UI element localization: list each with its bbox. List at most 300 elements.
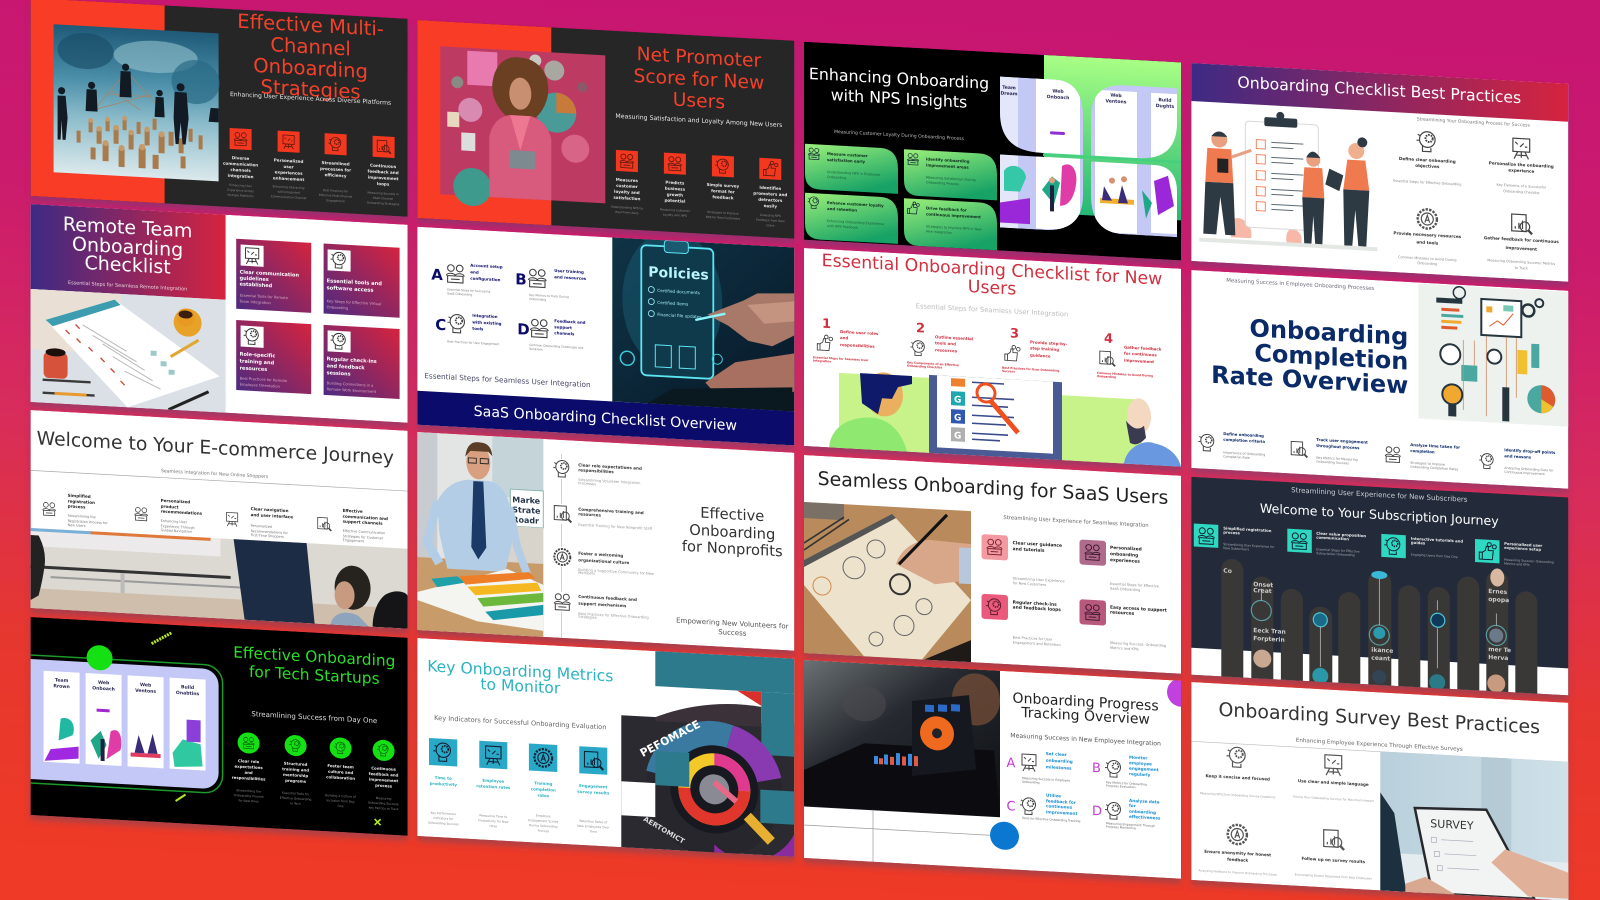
card: tools and software: Essential tools and (327, 278, 382, 287)
card: user guidance: and tutorials (1013, 546, 1045, 554)
photo: notebook with logo sketches (804, 502, 971, 662)
title: Checklist (84, 252, 171, 279)
card: user guidance: for New Customers (1013, 581, 1046, 587)
card: enhance loyalty: Enhancing Onboarding Experience (827, 219, 884, 226)
item: predicts growth: growth (667, 192, 683, 198)
item C: tools (472, 326, 484, 331)
subtitle: Measuring Success in Employee Onboarding Processes (1226, 278, 1374, 292)
card: user guidance: Streamlining User Experience (1013, 576, 1065, 583)
card: role-specific training: Employee Orientation (240, 382, 280, 389)
card: support resources (1080, 599, 1167, 653)
item: personalized experiences: enhancement (273, 175, 304, 182)
item: communication: communication and (343, 514, 388, 521)
illustration: phone screens panel: Team (55, 677, 69, 684)
item: personalize: experience (1508, 167, 1534, 174)
item: clear language: Use clear and simple language (1298, 778, 1369, 787)
item: continuous feedback: Onboarding Strategies (367, 200, 400, 206)
item: predicts growth (660, 152, 691, 218)
step 4: for continuous (1124, 351, 1157, 357)
item: registration (1194, 524, 1275, 553)
title: Seamless Onboarding for SaaS Users (818, 468, 1168, 509)
photo: man presenting marketing roadmap: Strate (512, 505, 541, 516)
card: identify improvement areas (904, 149, 997, 200)
card: regular check-ins: Regular check-ins (327, 356, 377, 365)
item B: Onboarding (529, 297, 546, 302)
step 2 (907, 321, 974, 371)
illustration: phone screens panel: Rrown (53, 683, 70, 690)
metric: engagement survey: Time (589, 829, 597, 834)
title: Onboarding (253, 54, 368, 83)
item D: D (1092, 804, 1102, 819)
item: culture: Building a Supportive Community for New (578, 568, 654, 576)
item: completion criteria (1198, 430, 1265, 461)
item C: Integration (472, 313, 498, 319)
photo: man presenting marketing roadmap (417, 432, 543, 637)
card: support resources: Easy access to support (1110, 605, 1167, 614)
item: expectations: Clear role (238, 758, 260, 764)
card: support resources: Measuring Success: Onboarding (1110, 641, 1166, 648)
item: streamlined processes: processes for (320, 166, 351, 173)
title: Effective (700, 505, 764, 525)
item: clear objectives: objectives (1415, 163, 1440, 169)
step 2: Key Components of an Effective (907, 360, 959, 367)
item: anonymity: Analyzing Feedback to Improve Onboarding Processes (1199, 868, 1277, 877)
item: streamlined processes: efficiency (325, 172, 347, 178)
card: regular check-ins: sessions (327, 370, 351, 378)
metric: retention: Productivity for New (478, 818, 509, 824)
item: track engagement: Onboarding Success (1316, 460, 1349, 465)
item: continuous feedback: feedback and (368, 169, 399, 175)
item: mentorship: Structured (284, 761, 308, 767)
metric: training completion: During Onboarding (529, 823, 558, 829)
chart lines and blue marker (804, 806, 1019, 870)
item: tutorials: guides (1411, 540, 1426, 546)
item: concise (1200, 745, 1276, 799)
item: diverse channels: integration (228, 173, 254, 179)
metric: training completion: Process (538, 829, 549, 833)
photo: glowing policies clipboard: Financial file updates (657, 312, 702, 319)
metric: engagement survey: Retention Rates of (579, 819, 608, 824)
card: tools and software (324, 244, 400, 318)
card: clear communication: Team Integration (239, 299, 271, 305)
metric: time to productivity: productivity (430, 781, 457, 787)
item: communication: Engagement (343, 538, 365, 543)
item: communication (318, 506, 388, 545)
pillars: journey arches (1221, 553, 1537, 713)
item: personalized experiences: Communication Channel (271, 194, 307, 200)
metric: training completion: completion (531, 786, 556, 793)
item: predicts growth: Loyalty with NPS (663, 213, 687, 218)
title: Key Onboarding Metrics (427, 657, 613, 685)
subtitle: Measuring Customer Loyalty During Onboarding Process (834, 129, 965, 142)
card: drive feedback: Hire Integration (926, 229, 952, 235)
item C: continuous (1046, 803, 1073, 810)
illustration: onboarding phone screens in lobes: Web (1052, 88, 1064, 95)
title: Welcome to Your Subscription Journey (1260, 500, 1499, 529)
item: clear language (1292, 753, 1375, 803)
pillars: journey arches: Co (1223, 567, 1232, 575)
subtitle: Streamlining User Experience for Seamless Integration (1003, 515, 1149, 529)
photo: checklist on desk with mug (31, 289, 226, 413)
item: simple survey: Strategies to Improve (707, 210, 739, 216)
item: expectations: and (245, 770, 253, 775)
item: value proposition: communication (1316, 535, 1349, 541)
item: registration (43, 491, 108, 529)
step 4: Gather feedback (1124, 345, 1162, 352)
photo: meeting room (31, 528, 408, 629)
item: personalized experiences (271, 130, 307, 200)
item D: effectiveness (1129, 814, 1161, 821)
subtitle: Success (718, 628, 747, 638)
card: measure satisfaction: Understanding NPS in Employee (827, 170, 880, 177)
card: enhance loyalty: Enhance customer loyalty (827, 200, 884, 208)
slide: Essential Onboarding Checklist for New Users (804, 248, 1181, 467)
item D (1092, 796, 1161, 832)
item C (1006, 790, 1081, 823)
card: role-specific training: training and (240, 358, 275, 366)
item: expectations: Streamlining the (236, 788, 261, 794)
illustration: onboarding phone screens in lobes: Build (1158, 97, 1172, 104)
item: mentorship: in Tech (290, 801, 301, 806)
item: track engagement (1291, 435, 1368, 466)
subtitle: Streamlining User Experience for New Subscribers (1291, 486, 1468, 504)
item B: Key Metrics to Track During (529, 293, 569, 299)
step 1: Integration (813, 358, 831, 364)
item A (431, 260, 503, 298)
item: mentorship: Effective Onboarding (280, 796, 311, 801)
item C: with existing (472, 319, 502, 326)
card: role-specific training: Role-specific (240, 351, 275, 359)
item D: Measuring Engagement Through (1106, 821, 1155, 828)
card: personalized: Essential Steps for Effective (1110, 582, 1159, 589)
item: continuous feedback: Measuring (376, 796, 391, 801)
illustration: phone screens panel: Ventons (135, 688, 156, 695)
item C: Best Practices for User Engagement (447, 339, 500, 346)
item: concise: Measuring Effective Onboarding Survey Questions (1200, 791, 1276, 799)
item: track engagement: throughout process (1316, 443, 1360, 450)
card: role-specific training: resources (240, 365, 267, 373)
item A: and (470, 269, 479, 275)
metric: engagement survey: Engagement (579, 783, 608, 789)
item: drop-off points: and reasons (1504, 453, 1532, 460)
illustration: dashboards and gauges (1418, 283, 1568, 427)
title: with NPS Insights (831, 85, 967, 112)
subtitle: Enhancing Employee Experience Through Effective Surveys (1296, 738, 1463, 753)
illustration: phone screens panel (7, 640, 223, 794)
photo: tablet with analytics dashboard (804, 660, 1000, 817)
photo: performance gauge with teal blocks: PEFOMACE (638, 718, 703, 760)
card: regular check-ins: Building Connections in a (327, 381, 373, 388)
illustration: onboarding phone screens in lobes (1000, 72, 1181, 242)
subtitle: Measuring Satisfaction and Loyalty Among New Users (615, 113, 782, 129)
item: communication: Strategies for Customer (343, 534, 384, 540)
item: continuous feedback (368, 739, 399, 811)
illustration: phone screens panel: Web (140, 682, 152, 689)
card: measure satisfaction (805, 144, 898, 194)
slide: Net Promoter Score for New Users (417, 20, 794, 239)
metric: time to productivity (428, 738, 459, 826)
item: tutorials: Engaging Users from Day One (1411, 552, 1458, 559)
item: drop-off points: Continuous Improvement (1504, 470, 1545, 476)
item C: C (1007, 799, 1016, 815)
metric: retention: Employee (482, 778, 505, 784)
card: clear communication: guidelines (240, 275, 269, 283)
item: clear objectives: Essential Steps for Effective Onboarding (1393, 179, 1461, 187)
item: measures loyalty: satisfaction (613, 195, 640, 201)
item: identifies promoters: easily (764, 203, 777, 209)
item B: regularly (1129, 771, 1151, 777)
card: identify improvement areas: Identify onboarding (926, 156, 970, 164)
item B: employee (1129, 760, 1152, 766)
item: diverse channels: communication (223, 161, 258, 168)
pillars: journey arches: mer Te (1488, 646, 1511, 654)
pillars: journey arches: opopa (1488, 596, 1509, 604)
item: drop-off points: Identify drop-off points (1504, 447, 1556, 455)
card: clear communication (236, 239, 311, 313)
item: mentorship: Essential Tools for (282, 791, 310, 796)
photo: glowing policies clipboard: Certified items (657, 300, 688, 307)
metric: retention: retention rates (476, 783, 511, 790)
item: measures loyalty: customer (616, 183, 638, 189)
item: measures loyalty: loyalty and (614, 189, 640, 195)
item D: Feedback and (554, 318, 586, 325)
illustration: onboarding phone screens in lobes: Ventons (1105, 98, 1127, 105)
item: user setup: experience setup (1504, 545, 1541, 552)
title: for Tech Startups (249, 663, 380, 688)
item: track engagement: Track user engagement (1316, 437, 1368, 445)
item: value proposition (1287, 529, 1366, 558)
item: follow up: Encouraging Honest Responses from New Employees (1295, 872, 1372, 881)
item: streamlined processes: Best Practices for (323, 188, 349, 194)
item: team culture (325, 737, 357, 809)
item: registration: registration (68, 499, 95, 505)
item: continuous feedback: process (375, 783, 393, 789)
slide: Seamless Onboarding for SaaS Users (804, 455, 1181, 674)
title: for Nonprofits (682, 538, 783, 560)
item: continuous feedback: support mechanisms (578, 601, 627, 608)
title: Enhancing Onboarding (809, 64, 989, 93)
card: measure satisfaction: Onboarding (827, 175, 846, 180)
card: check-ins: Regular check-ins (1013, 599, 1057, 608)
item: personalized experiences: Personalized (274, 157, 303, 164)
green panel (1044, 55, 1181, 220)
item: measures loyalty: Understanding NPS by (611, 205, 643, 210)
item D: Analyze data (1129, 798, 1160, 805)
item: diverse channels: Multiple Platforms (228, 193, 254, 198)
step 1: Define user roles (840, 329, 879, 336)
item: navigation: and user interface (251, 512, 293, 519)
item D: onboarding (1129, 809, 1156, 815)
item B (515, 266, 587, 304)
subtitle: Key Indicators for Successful Onboarding Evaluation (434, 714, 606, 731)
title: to Monitor (480, 675, 561, 698)
card: support resources: resources (1110, 610, 1135, 617)
item A: Onboarding (1022, 780, 1040, 785)
step 1: responsibilities (840, 342, 875, 349)
item A: onboarding (1046, 758, 1073, 764)
item: culture: organizational culture (578, 557, 630, 565)
item B: engagement (1129, 766, 1159, 772)
item: streamlined processes (319, 133, 353, 204)
card: check-ins: Engagement and Retention (1013, 640, 1061, 647)
step 2: 2 (916, 321, 925, 337)
item: continuous feedback: Onboarding Success: (368, 801, 399, 806)
card: check-ins (982, 594, 1061, 647)
card: user guidance: Clear user guidance (1013, 540, 1062, 549)
item: gather feedback: Gather feedback for continuous (1484, 235, 1559, 244)
item: identifies promoters: Users (766, 223, 775, 228)
item C: feedback for (1046, 798, 1077, 805)
photo: glowing policies clipboard: Policies (648, 264, 709, 284)
card: check-ins: and feedback loops (1013, 604, 1061, 613)
item: training: Comprehensive training and (578, 507, 644, 515)
item B: Progress Evaluation (1106, 784, 1136, 789)
card: personalized: Personalized (1110, 545, 1142, 553)
illustration: search monitor with two people: G (954, 413, 961, 424)
step 2: Outline essential (935, 334, 974, 341)
item: drop-off points: Analyzing Onboarding Data for (1504, 466, 1554, 473)
item: anonymity: feedback (1227, 857, 1249, 863)
title: SaaS Onboarding Checklist Overview (474, 404, 737, 434)
item: user setup: Metrics and KPIs (1504, 562, 1530, 567)
decorative magenta quarter circle (1167, 678, 1195, 708)
item: predicts growth: business (665, 186, 686, 192)
slide: Effective Onboarding for Nonprofits (417, 432, 794, 651)
illustration: phone screens panel: Web (98, 680, 110, 686)
item: recommendations: Experience Through (161, 524, 195, 530)
slide: Enhancing Onboarding with NPS Insights (804, 42, 1181, 260)
item: measures loyalty: Real-Time Users (615, 210, 639, 215)
pillars: journey arches: ikance (1371, 647, 1393, 655)
card: check-ins: Best Practices for User (1013, 635, 1053, 642)
item: continuous feedback: Continuous (370, 163, 397, 169)
item A: Measuring Success in Employee (1022, 776, 1070, 783)
item: measures loyalty: Measures (616, 177, 639, 183)
item: registration: New Users (68, 523, 86, 528)
item: identifies promoters: detractors (758, 197, 783, 203)
photo: performance gauge with teal blocks: AERTOMICT (642, 815, 686, 846)
item B: Key Metrics for Onboarding (1106, 780, 1147, 787)
item D: Solutions (529, 347, 543, 352)
item: analyze time: Onboarding Completion Rates (1410, 465, 1459, 471)
item: diverse channels: Enhancing User (229, 183, 253, 188)
card: support resources: Metrics and KPIs (1110, 646, 1139, 651)
item: continuous feedback (552, 591, 649, 623)
illustration: phone screens panel: Build (181, 684, 194, 691)
metric: time to productivity: Time to (435, 775, 452, 781)
item: personalize: Personalize the onboarding (1489, 160, 1554, 169)
step 4: improvement (1124, 358, 1154, 364)
item: value proposition: Clear value proposition (1316, 531, 1366, 538)
item: simple survey: Simple survey (707, 182, 740, 189)
title: Users (968, 277, 1016, 300)
item C: C (435, 316, 446, 334)
item: analyze time: Analyze time taken for (1410, 442, 1460, 450)
card: identify improvement areas: Measuring Satisfaction During (926, 175, 976, 182)
item: follow up: Follow up on survey results (1302, 856, 1366, 864)
card: user guidance (982, 534, 1065, 588)
subtitle: Streamlining Your Onboarding Process for Success (1417, 116, 1530, 129)
item A: Essential Steps for Successful (447, 287, 491, 294)
item: diverse channels: Diverse (232, 155, 250, 161)
illustration: team with checklist (1199, 107, 1377, 251)
item: continuous feedback: Key Metrics to Track (369, 806, 399, 811)
item: continuous feedback: improvement (369, 777, 398, 783)
item: continuous feedback: Strategies (578, 615, 597, 620)
subtitle: Streamlining Success from Day One (251, 710, 377, 725)
metric: training completion: rates (537, 793, 550, 798)
pillars: journey arches: Creat (1253, 587, 1272, 595)
item: personalized experiences: Enhancing Interacting (273, 184, 305, 190)
title: Users (673, 90, 725, 113)
item: culture (552, 546, 654, 579)
item D: Common Onboarding Challenges and (529, 343, 584, 350)
item: value proposition: Essential Steps for Effective (1316, 547, 1360, 554)
pillars: journey arches: Onset (1253, 581, 1273, 589)
item: resources: Onboarding (1417, 261, 1437, 266)
item: simple survey: feedback (712, 194, 734, 200)
item: completion criteria: Importance of Onboarding (1223, 450, 1265, 457)
item: registration: Simplified (68, 493, 91, 499)
pillars: journey arches: Eeck Tran (1253, 627, 1286, 636)
item D: support (554, 324, 572, 330)
item: resources (1393, 208, 1462, 268)
item A: A (431, 265, 443, 284)
item: completion criteria: Completion Rate (1223, 454, 1250, 460)
step 2: resources (935, 347, 958, 353)
item: personalize (1489, 137, 1554, 196)
photo: glowing policies clipboard: Certified documents (657, 288, 700, 295)
header band (1191, 63, 1568, 122)
photo: executives and chess pieces (54, 24, 220, 181)
item: continuous feedback (367, 135, 400, 206)
item: personalized experiences: experiences (275, 169, 303, 176)
slide: SaaS Onboarding Checklist Overview (417, 217, 794, 445)
item: navigation: Personalized (251, 524, 272, 529)
item: completion criteria: Define onboarding (1223, 431, 1264, 438)
illustration: search monitor with two people: G (954, 395, 961, 406)
item C: improvement (1046, 809, 1077, 816)
item: concise: Keep it concise and focused (1205, 773, 1270, 782)
metric: time to productivity: Key Performance (431, 811, 456, 816)
item: recommendations: product (161, 504, 179, 510)
item: continuous feedback: Measuring Success in (368, 191, 399, 196)
card: tools and software: software access (327, 285, 373, 294)
slide: Onboarding Progress Tracking Overview (804, 658, 1195, 880)
item: registration: Streamlining the (68, 514, 96, 519)
step 3: step training (1030, 345, 1059, 352)
item: continuous feedback: Multi-Channel (373, 196, 393, 201)
subtitle: Essential Steps for Seamless Remote Integration (68, 280, 187, 293)
photo: woman with tablet and spheres (440, 46, 605, 213)
item: analyze time (1385, 441, 1460, 471)
subtitle: Seamless Integration for New Online Shoppers (161, 468, 269, 480)
card: clear communication: established (240, 281, 273, 289)
card: clear communication: Essential Tools for Remote (240, 293, 289, 300)
item: continuous feedback: Best Practices for Effective Onboarding (578, 612, 649, 620)
step 3: 3 (1010, 326, 1019, 342)
item: navigation: Clear navigation (251, 506, 289, 513)
step 3 (1002, 326, 1068, 376)
card: personalized: experiences (1110, 557, 1140, 565)
item: completion criteria: completion criteria (1223, 437, 1265, 444)
photo: performance gauge with teal blocks (621, 649, 794, 863)
step 1: Essential Steps for Seamless User (813, 355, 869, 362)
slide: Onboarding Survey Best Practices (1191, 682, 1568, 900)
item: anonymity: Ensure anonymity for honest (1204, 849, 1271, 857)
title: Score for New (634, 66, 764, 94)
card: regular check-ins: and feedback (327, 363, 365, 371)
